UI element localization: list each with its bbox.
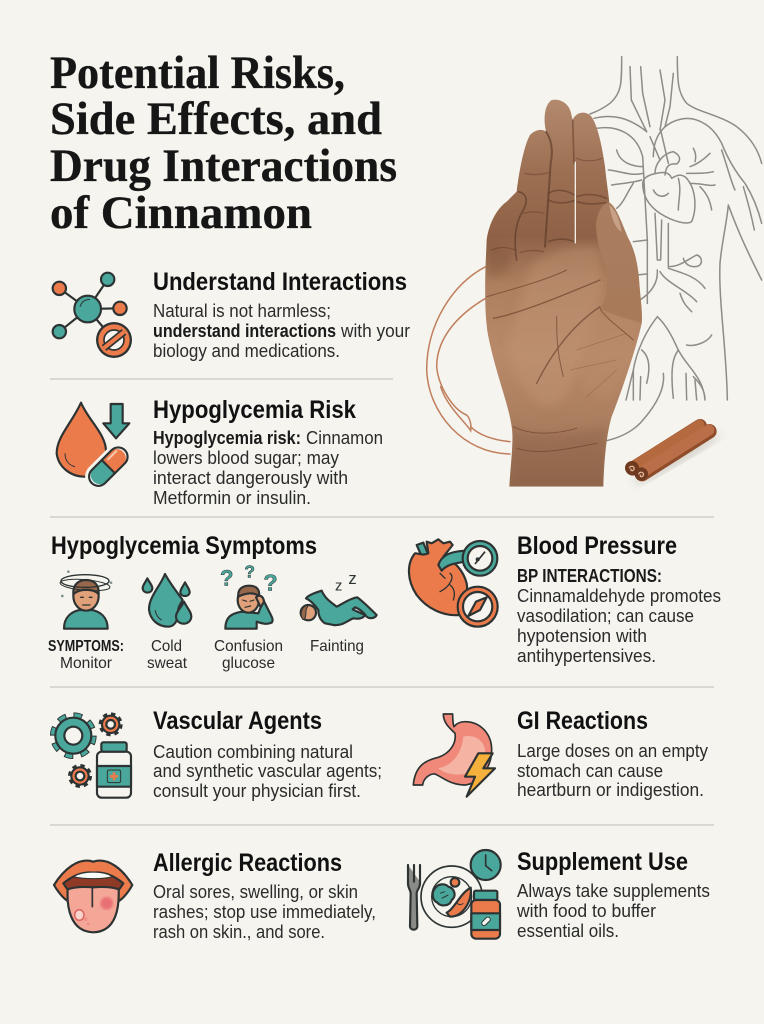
body text: vasodilation; can cause xyxy=(517,606,694,626)
body text: rash on skin., and sore. xyxy=(153,922,325,942)
palm lines xyxy=(487,270,633,451)
heading: Blood Pressure xyxy=(517,532,677,560)
icon: confusion: ? xyxy=(220,566,233,591)
icon: dizziness xyxy=(60,570,112,629)
heading: Allergic Reactions xyxy=(153,849,342,877)
body text: Cinnamaldehyde promotes xyxy=(517,586,721,606)
body text: Always take supplements xyxy=(517,881,710,901)
hand xyxy=(480,93,647,490)
icon: fainting: z xyxy=(348,569,357,588)
panel: allergic reactions xyxy=(54,849,376,942)
body text xyxy=(153,301,410,361)
icon: blood drop, arrow and pill xyxy=(57,403,137,495)
circulatory system line drawing xyxy=(590,57,762,441)
panel: supplement use xyxy=(408,848,710,941)
icon: confusion xyxy=(220,561,278,629)
body text xyxy=(153,428,383,508)
body text: Large doses on an empty xyxy=(517,741,708,761)
body text xyxy=(516,881,710,941)
body text: consult your physician first. xyxy=(153,781,361,801)
panel: hypoglycemia symptoms xyxy=(48,532,377,672)
title xyxy=(50,47,397,239)
icon: confusion: ? xyxy=(244,561,255,581)
body text: Natural is not harmless; xyxy=(153,301,331,321)
body text: Metformin or insulin. xyxy=(153,488,311,508)
orange body curve xyxy=(427,267,510,454)
body text: interact dangerously with xyxy=(153,468,348,488)
body text: lowers blood sugar; may xyxy=(153,448,339,468)
symptom labels xyxy=(48,638,364,672)
body text: antihypertensives. xyxy=(517,646,656,666)
icon: gears and medicine bottle xyxy=(53,715,131,798)
icon: stomach with lightning bolt xyxy=(413,714,495,797)
cinnamon sticks xyxy=(625,425,723,488)
icon: fork, plate, clock and bottle xyxy=(408,850,501,939)
body text: heartburn or indigestion. xyxy=(517,780,704,800)
title: Drug Interactions xyxy=(50,140,397,192)
body text: essential oils. xyxy=(517,921,619,941)
thumb xyxy=(596,203,642,323)
icon: mouth and tongue with sores xyxy=(54,861,132,932)
panel: hypoglycemia risk xyxy=(57,396,383,508)
body text: Hypoglycemia risk: xyxy=(153,428,301,448)
icon: heart with gauges xyxy=(409,539,498,627)
heading: Hypoglycemia Symptoms xyxy=(51,532,317,560)
icon: cold sweat drops xyxy=(143,574,191,627)
body text: Caution combining natural xyxy=(153,742,353,762)
panel: vascular agents xyxy=(53,707,382,801)
title: of Cinnamon xyxy=(50,187,312,239)
icon: confusion: ? xyxy=(263,570,278,596)
body text: understand interactions xyxy=(153,321,336,341)
symptom labels: glucose xyxy=(222,655,275,672)
body text: BP INTERACTIONS: xyxy=(517,566,662,586)
icon: fainting: z xyxy=(335,579,342,595)
body text: biology and medications. xyxy=(153,341,340,361)
body text: rashes; stop use immediately, xyxy=(153,902,376,922)
body text: stomach can cause xyxy=(517,761,663,781)
symptom labels: Fainting xyxy=(310,638,364,655)
hero illustration: hand, circulatory system and cinnamon xyxy=(427,57,762,490)
finger gap highlight xyxy=(574,162,576,244)
body text: Oral sores, swelling, or skin xyxy=(153,882,358,902)
body text xyxy=(153,882,376,942)
body text xyxy=(517,566,721,666)
heading: Vascular Agents xyxy=(153,707,322,735)
finger gaps and knuckle creases xyxy=(492,120,607,260)
icon: fainting xyxy=(301,569,377,625)
body text: and synthetic vascular agents; xyxy=(153,761,382,781)
body text xyxy=(153,742,382,801)
symptom labels: SYMPTOMS: xyxy=(48,638,124,655)
body text xyxy=(517,741,708,800)
symptom labels: Confusion xyxy=(214,638,283,655)
panel: understand interactions xyxy=(53,268,410,361)
symptom labels: sweat xyxy=(147,655,188,672)
panel: gi reactions xyxy=(413,707,708,800)
title: Potential Risks, xyxy=(50,47,345,99)
heading: Hypoglycemia Risk xyxy=(153,396,356,424)
heading: Understand Interactions xyxy=(153,268,407,296)
body text: Cinnamon xyxy=(306,428,383,448)
symptom labels: Cold xyxy=(151,638,182,655)
body text: hypotension with xyxy=(517,626,647,646)
title: Side Effects, and xyxy=(50,93,382,145)
symptom labels: Monitor xyxy=(60,655,113,672)
icon: molecule with prohibition sign xyxy=(53,273,132,358)
heading: GI Reactions xyxy=(517,707,648,735)
heading: Supplement Use xyxy=(517,848,688,876)
panel: blood pressure xyxy=(409,532,721,666)
body text: with food to buffer xyxy=(516,901,656,921)
body text: with your xyxy=(340,321,410,341)
